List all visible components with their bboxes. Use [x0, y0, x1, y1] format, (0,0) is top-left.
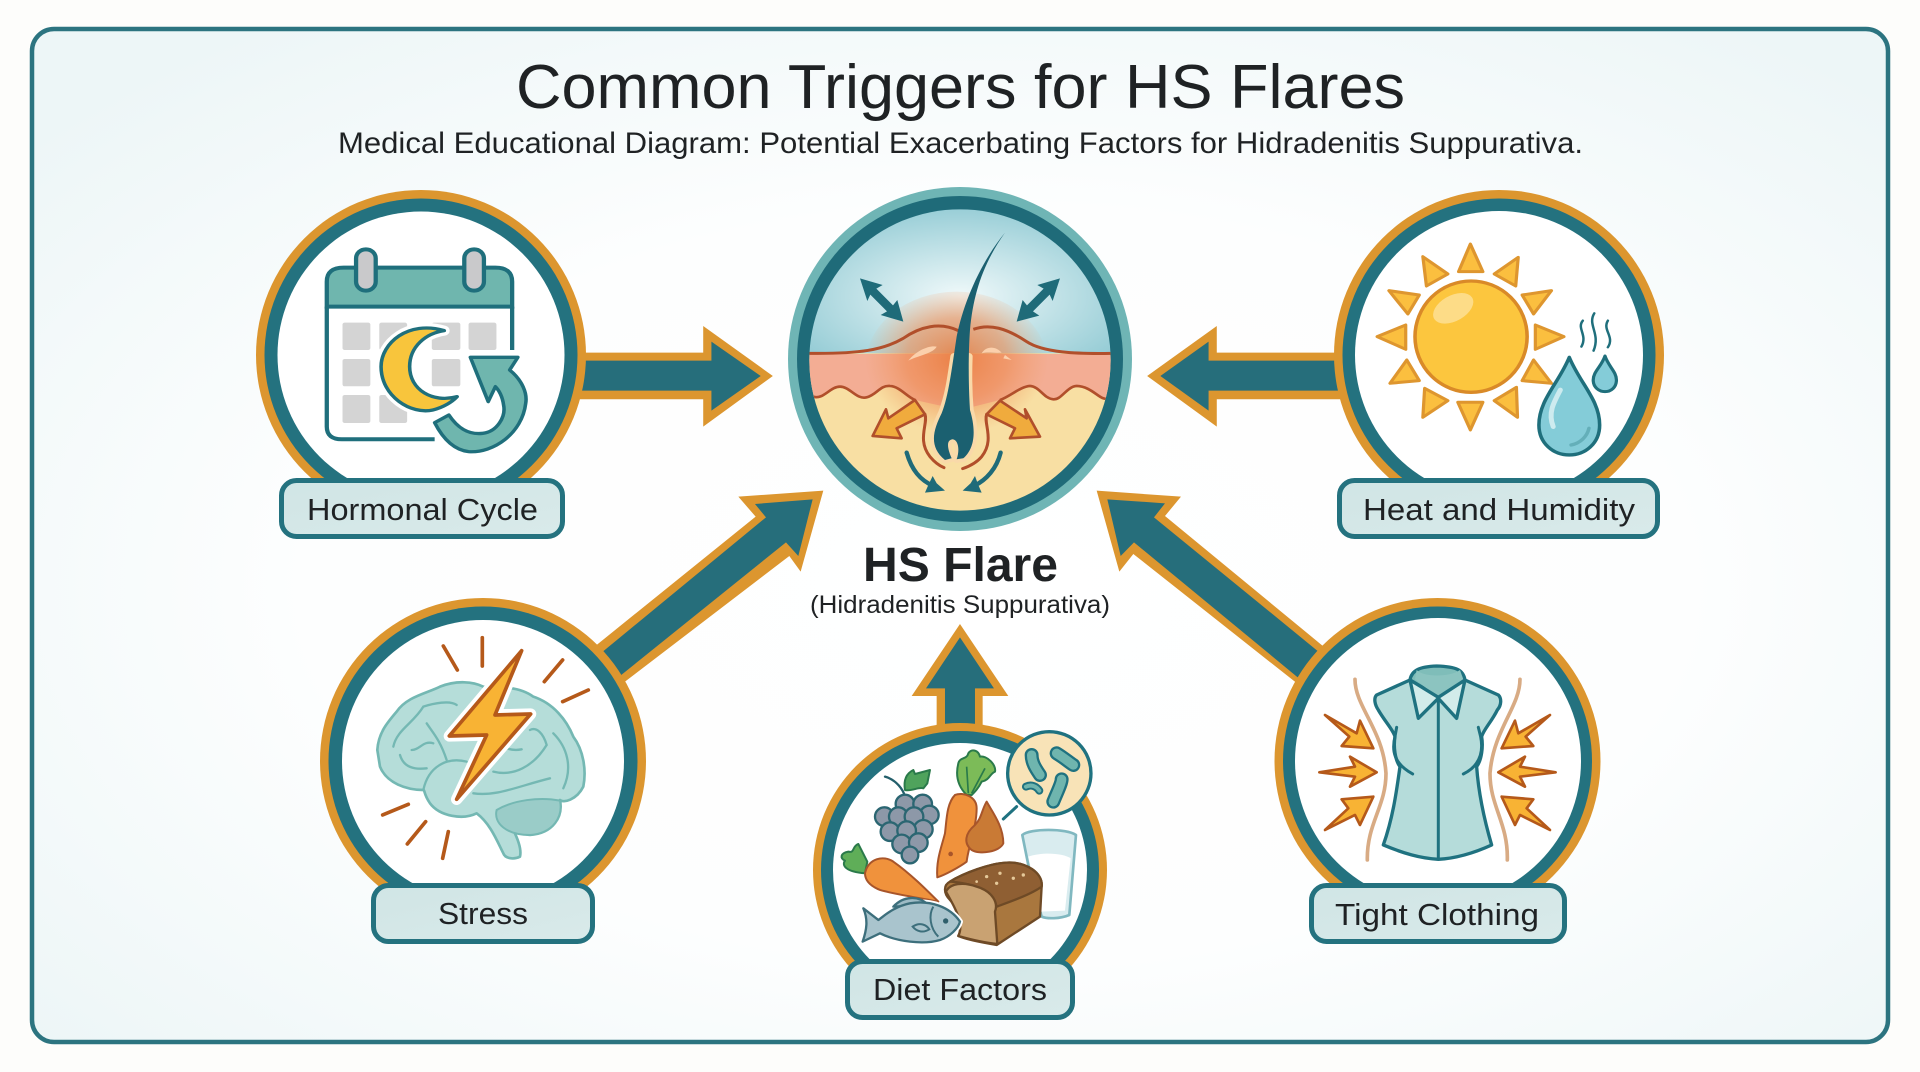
grapes	[875, 770, 939, 863]
label: tight clothing: Tight Clothing	[1335, 897, 1539, 932]
label: hormonal cycle: Hormonal Cycle	[307, 492, 538, 527]
arrow: stress to flare	[587, 491, 823, 689]
icon: tight shirt with compression arrows	[1319, 666, 1556, 860]
ring: stress	[320, 598, 646, 924]
arrow: clothing to flare	[1097, 491, 1337, 692]
label: heat and humidity	[1340, 480, 1658, 536]
bread loaf	[945, 863, 1042, 945]
panel: diet factors	[813, 624, 1107, 1018]
label: diet factors: Diet Factors	[873, 972, 1047, 1007]
carrot lying	[842, 844, 938, 902]
icon: inflamed hair follicle cross-section	[807, 207, 1113, 513]
label: stress: Stress	[438, 896, 528, 931]
ring: diet factors	[813, 723, 1107, 1017]
panel: central HS flare	[788, 187, 1132, 619]
glass of milk	[1022, 830, 1076, 918]
ring: tight clothing	[1274, 598, 1600, 924]
caption: Hidradenitis Suppurativa: (Hidradenitis Suppurativa)	[810, 591, 1110, 619]
label: heat and humidity: Heat and Humidity	[1363, 492, 1636, 527]
icon: brain with lightning bolt	[377, 638, 588, 858]
fish	[863, 898, 960, 942]
subtitle: Medical Educational Diagram: Potential Exacerbating Factors for Hidradenitis Suppurativa.	[338, 127, 1583, 160]
panel: stress	[320, 491, 823, 942]
panel: hormonal cycle	[256, 190, 773, 536]
title: Common Triggers for HS Flares	[516, 53, 1405, 122]
panel: heat and humidity	[1147, 190, 1664, 536]
heading: HS Flare: HS Flare	[863, 539, 1058, 592]
label: diet factors	[848, 962, 1072, 1018]
carrot upright and root	[937, 750, 1003, 877]
arrow: diet to flare	[912, 624, 1008, 730]
magnifier with bacteria	[1003, 732, 1091, 819]
ring: center	[788, 187, 1132, 531]
icon: food group with microbes	[842, 732, 1091, 945]
ring: heat and humidity	[1334, 190, 1664, 520]
arrow: heat to flare	[1147, 326, 1351, 427]
icon: calendar with moon and cycle arrow	[327, 249, 526, 452]
arrow: hormonal cycle to flare	[561, 326, 773, 427]
icon: sun and water drops	[1377, 244, 1616, 455]
panel: tight clothing	[1097, 491, 1600, 942]
ring: hormonal cycle	[256, 190, 586, 520]
label: tight clothing	[1312, 886, 1564, 942]
label: hormonal cycle	[282, 480, 562, 536]
label: stress	[374, 886, 592, 942]
